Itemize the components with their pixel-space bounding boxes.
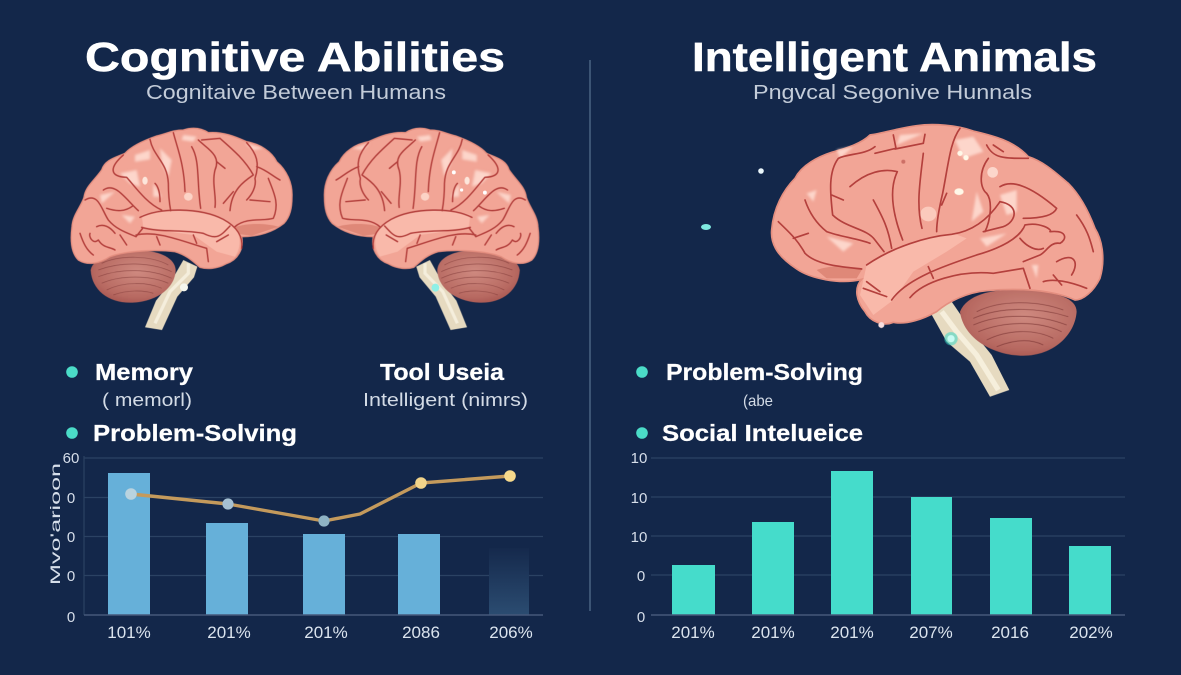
subtitle: right: Pngvcal Segonive Hunnals: [753, 82, 1032, 104]
x axis labels: 201%: [830, 623, 874, 642]
x axis labels: 201%: [671, 623, 715, 642]
legend item: tool use: Intelligent (nimrs): [363, 390, 528, 410]
icon: left-facing brain: [71, 128, 292, 330]
x axis labels: 2086: [402, 623, 440, 642]
legend item: tool use: [363, 359, 528, 410]
x axis labels: 201%: [304, 623, 348, 642]
y axis labels: 0: [67, 490, 75, 507]
x axis labels: [107, 623, 533, 642]
y axis labels: 0: [637, 609, 645, 626]
bars: [672, 471, 1111, 615]
y axis labels: 10: [631, 529, 647, 546]
legend item: memory: [66, 359, 193, 410]
bars: [108, 473, 529, 615]
legend item: social intelligence: Social Intelueice: [662, 420, 863, 446]
chart: teal bars: [631, 450, 1125, 642]
legend item: problem solving: Problem-Solving: [93, 420, 297, 446]
right panel: intelligent animals: [631, 34, 1125, 642]
subtitle: left: Cognitaive Between Humans: [146, 82, 446, 104]
left panel: cognitive abilities: [47, 34, 543, 642]
y axis labels: 0: [67, 609, 75, 626]
title: intelligent animals: Intelligent Animals: [692, 34, 1097, 80]
trend line: [125, 470, 516, 527]
x axis labels: 201%: [751, 623, 795, 642]
stray highlight dots: [701, 168, 764, 230]
y axis title: Mvo'arioon: [47, 463, 63, 585]
title: cognitive abilities: Cognitive Abilities: [85, 34, 505, 80]
x axis labels: 202%: [1069, 623, 1113, 642]
y axis labels: 10: [631, 490, 647, 507]
legend item: memory: Memory: [95, 359, 193, 385]
divider: [589, 60, 591, 611]
icon: large brain: [772, 125, 1103, 397]
y axis labels: 0: [67, 568, 75, 585]
y axis labels: 60: [63, 450, 79, 467]
legend item: tool use: Tool Useia: [380, 359, 504, 385]
legend item: problem solving: Problem-Solving: [666, 359, 863, 385]
x axis labels: [671, 623, 1113, 642]
x axis labels: 101%: [107, 623, 151, 642]
icon: right-facing brain: [324, 128, 539, 330]
y axis labels: 0: [67, 529, 75, 546]
legend item: problem solving: [636, 359, 863, 410]
x axis labels: 207%: [909, 623, 953, 642]
x axis labels: 206%: [489, 623, 533, 642]
y axis labels: [631, 450, 647, 626]
y axis labels: 0: [637, 568, 645, 585]
legend item: problem solving: (abe: [743, 393, 773, 410]
chart: bars with line: [47, 450, 543, 642]
y axis labels: [63, 450, 79, 626]
x axis labels: 2016: [991, 623, 1029, 642]
x axis labels: 201%: [207, 623, 251, 642]
legend item: memory: ( memorl): [102, 390, 192, 410]
y axis labels: 10: [631, 450, 647, 467]
